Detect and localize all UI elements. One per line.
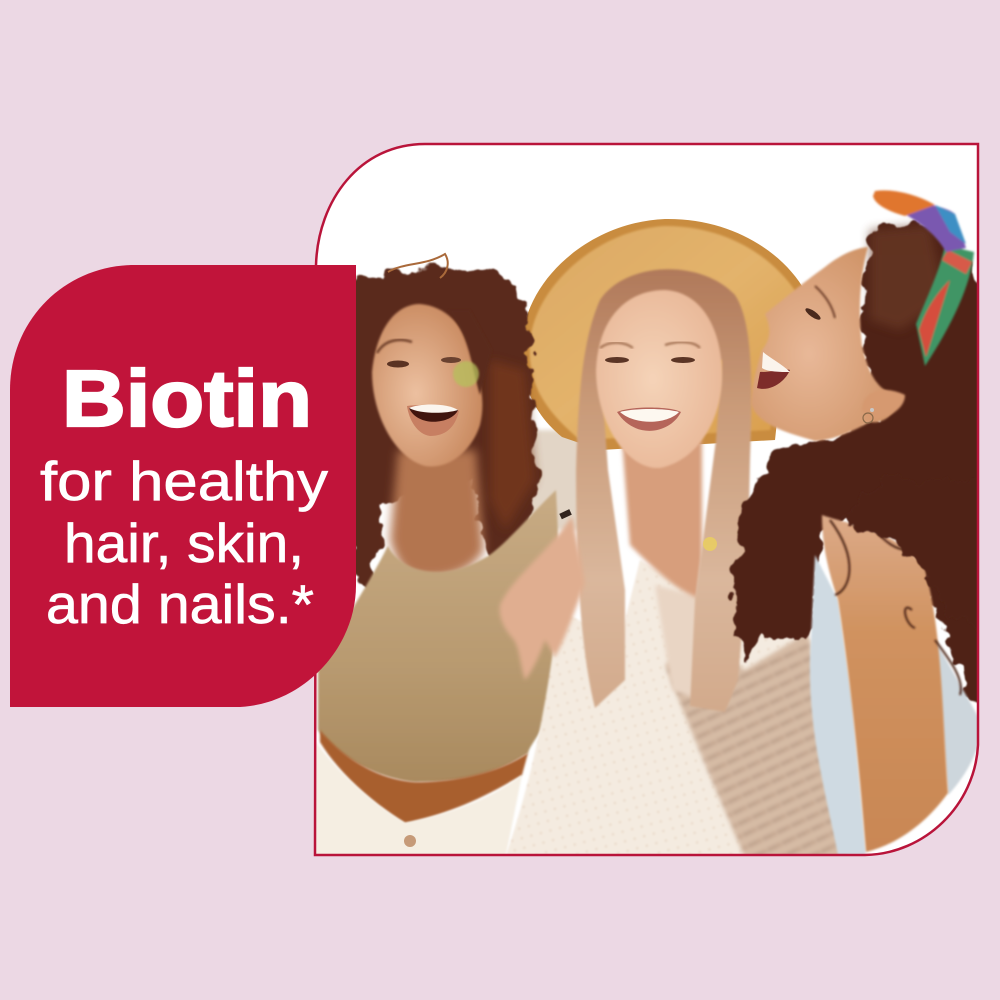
red callout card — [10, 265, 356, 707]
arm and hand — [500, 516, 585, 680]
eyes and brows — [605, 357, 629, 363]
hair curls — [830, 510, 961, 695]
woman right — [733, 190, 990, 855]
midriff — [320, 730, 528, 823]
mouth — [407, 405, 459, 436]
face — [751, 247, 896, 441]
denim vest — [810, 555, 866, 855]
text block: tagline: and nails.* — [46, 573, 314, 635]
neck — [622, 440, 702, 598]
arm — [822, 515, 948, 852]
text block: tagline: hair, skin, — [64, 512, 304, 574]
mouth — [757, 369, 790, 389]
crop top — [318, 490, 562, 782]
mouth — [617, 408, 681, 431]
ear — [882, 388, 906, 418]
white trousers — [315, 742, 522, 860]
blonde hair — [576, 269, 751, 712]
lace blouse — [506, 560, 811, 854]
woman left — [315, 254, 562, 860]
eyes and brows — [387, 360, 409, 368]
text block: tagline: for healthy — [40, 450, 329, 512]
face — [372, 304, 482, 467]
infographic canvas — [10, 142, 980, 856]
woman centre: hat — [522, 219, 805, 450]
photo panel: three laughing women — [315, 144, 990, 860]
eye and brow — [805, 308, 821, 320]
curly hair — [733, 221, 990, 720]
neck — [390, 450, 484, 579]
woman centre — [500, 269, 848, 858]
panel outline — [315, 144, 978, 855]
face — [596, 290, 722, 468]
scarf — [873, 190, 974, 366]
text block: tagline — [40, 450, 329, 635]
heading: Biotin: Biotin — [62, 354, 312, 443]
